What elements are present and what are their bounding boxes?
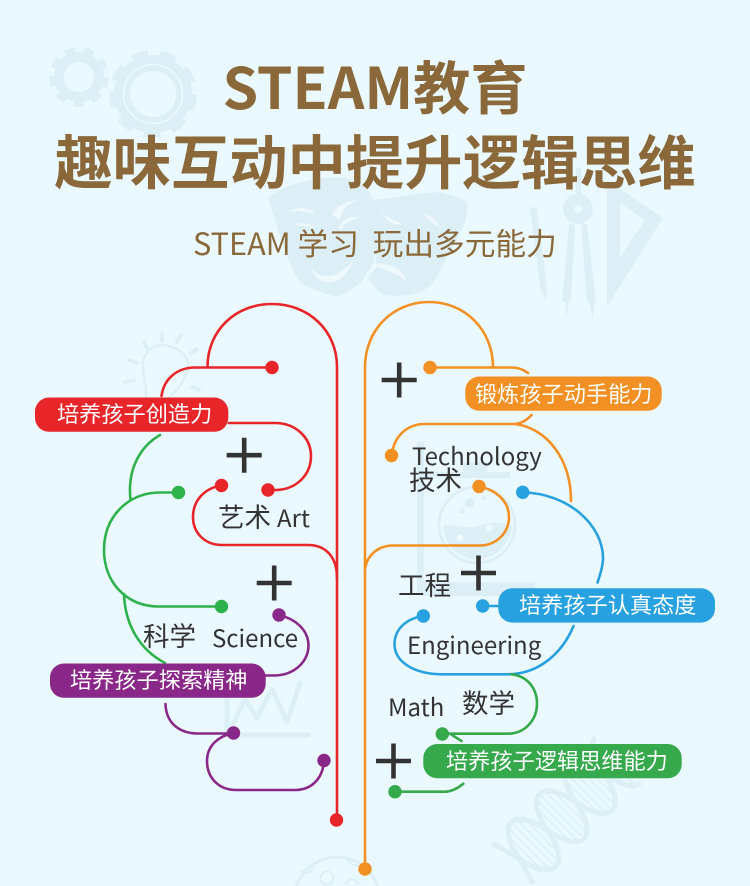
icon: set square: [607, 180, 663, 307]
plus icon: engineering: [461, 556, 496, 590]
label: art cn: 艺术: [218, 496, 271, 535]
pill: exploration: 培养孩子探索精神: [70, 663, 248, 695]
subtitle: STEAM 学习 玩出多元能力: [193, 219, 557, 264]
green science branch: [104, 435, 221, 663]
icon: planet: [296, 857, 378, 886]
pill: hands-on: 锻炼孩子动手能力: [475, 377, 652, 409]
icon: pencil: [530, 207, 547, 300]
blue engineering branch: [394, 492, 603, 674]
plus icon: science: [257, 566, 292, 600]
purple dots: [227, 608, 331, 767]
label: engineering en: Engineering: [407, 626, 542, 661]
icon: compass: [562, 168, 596, 320]
pill: logic: 培养孩子逻辑思维能力: [446, 744, 668, 776]
red dots: [215, 361, 343, 827]
blue dots: [417, 486, 529, 623]
plus icon: math: [376, 744, 411, 778]
icon: line chart: [227, 683, 308, 735]
green math dots: [388, 727, 449, 798]
label: engineering cn: 工程: [398, 564, 451, 603]
icon: large gear: [113, 54, 193, 134]
label: science en: Science: [212, 619, 298, 654]
icon: chemistry flask: [417, 442, 535, 596]
green dots: [172, 486, 228, 613]
pill: creativity: 培养孩子创造力: [57, 397, 212, 429]
orange dots: [358, 361, 486, 876]
icon: small gear: [52, 50, 106, 104]
title: STEAM教育: [222, 44, 528, 126]
green math branch: [395, 674, 537, 792]
orange technology branch: [365, 302, 571, 869]
label: science cn: 科学: [143, 615, 196, 654]
label: technology en: Technology: [412, 437, 542, 472]
label: math en: Math: [388, 688, 444, 723]
purple branch: [166, 615, 324, 790]
icon: theatre masks: [268, 178, 467, 297]
title: [54, 44, 696, 201]
label: math cn: 数学: [462, 682, 515, 721]
pill: attitude: 培养孩子认真态度: [519, 588, 696, 620]
icon: light bulb: [125, 333, 199, 400]
title: 趣味互动中提升逻辑思维: [54, 116, 696, 201]
label: technology cn: 技术: [409, 459, 462, 498]
plus icon: technology: [382, 362, 417, 398]
label: art en: Art: [277, 499, 310, 534]
icon: DNA helix: [491, 737, 641, 886]
plus icon: art: [227, 438, 262, 473]
red art branch: [162, 304, 337, 820]
